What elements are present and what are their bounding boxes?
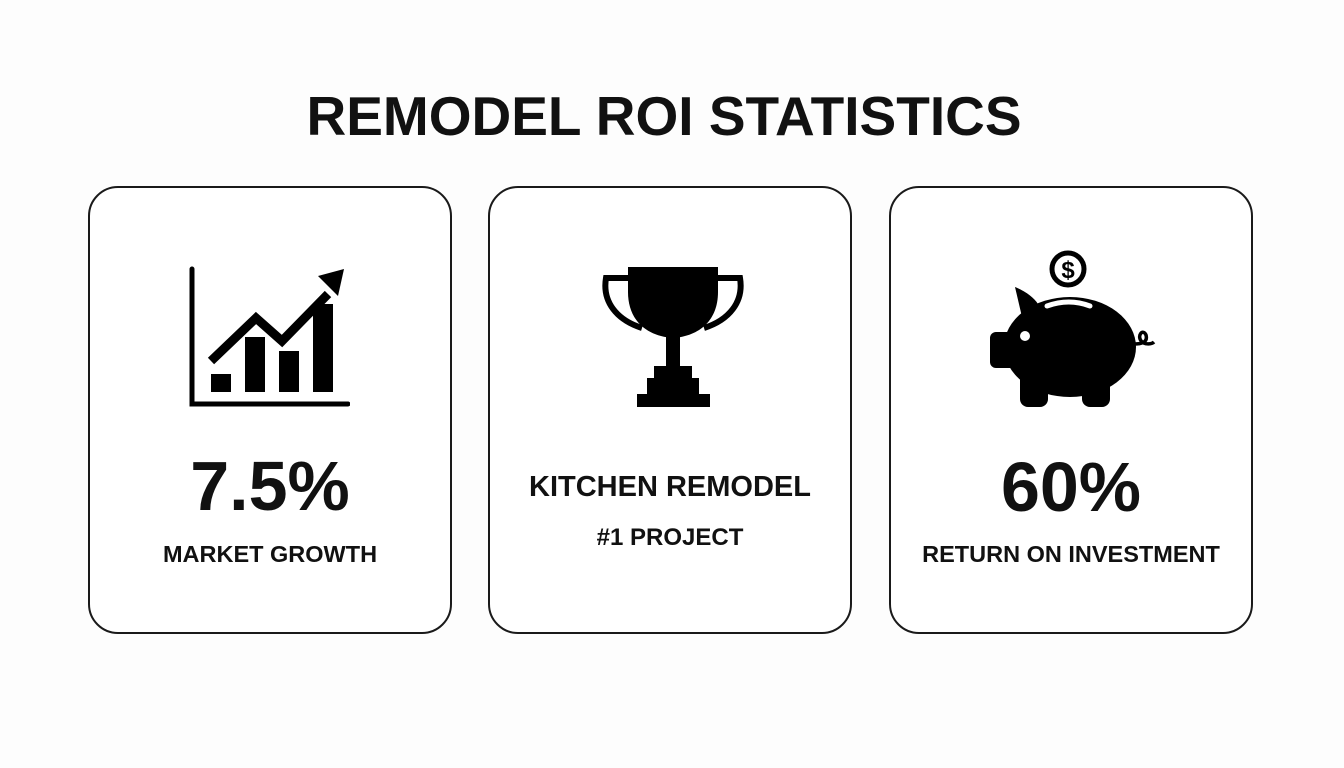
stat: 7.5%: 7.5% — [190, 447, 350, 525]
panel: return on investment — [889, 186, 1253, 634]
stat: 60%: 60% — [1001, 448, 1141, 526]
label: return on investment: RETURN ON INVESTMENT — [922, 541, 1220, 567]
icon: trophy — [602, 267, 744, 407]
panel: market growth — [88, 186, 452, 634]
title: REMODEL ROI STATISTICS — [306, 85, 1022, 147]
icon: piggy bank: $ — [1061, 257, 1075, 284]
panel: kitchen remodel — [488, 186, 852, 634]
icon: piggy bank — [990, 250, 1156, 407]
label: market growth: MARKET GROWTH — [163, 541, 377, 567]
label: #1 project: #1 PROJECT — [597, 524, 743, 551]
heading: kitchen remodel: KITCHEN REMODEL — [529, 471, 811, 503]
icon: growth chart — [190, 266, 350, 406]
